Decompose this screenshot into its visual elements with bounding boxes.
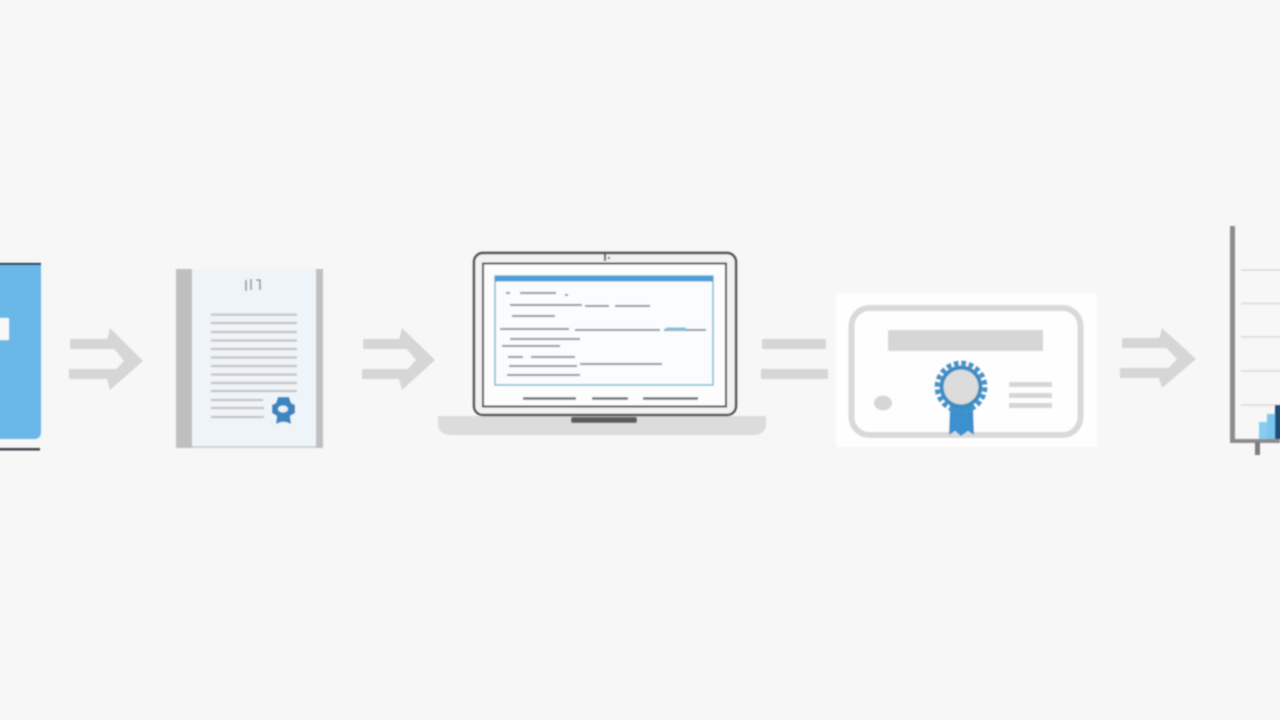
icon: laptop	[438, 253, 766, 435]
icon: blue seal	[272, 397, 295, 424]
window: application form	[495, 276, 713, 385]
icon: certificate	[836, 293, 1097, 447]
icon: document with seal	[176, 269, 323, 448]
icon: tablet	[0, 263, 41, 450]
arrow: tablet to document	[69, 328, 143, 390]
equals sign	[761, 339, 828, 379]
arrow: certificate to chart	[1120, 328, 1196, 388]
chart: bar chart cropped at right edge	[1230, 226, 1280, 455]
arrow: document to laptop	[362, 328, 435, 390]
icon: rosette seal	[937, 363, 985, 436]
bars	[1259, 405, 1280, 439]
